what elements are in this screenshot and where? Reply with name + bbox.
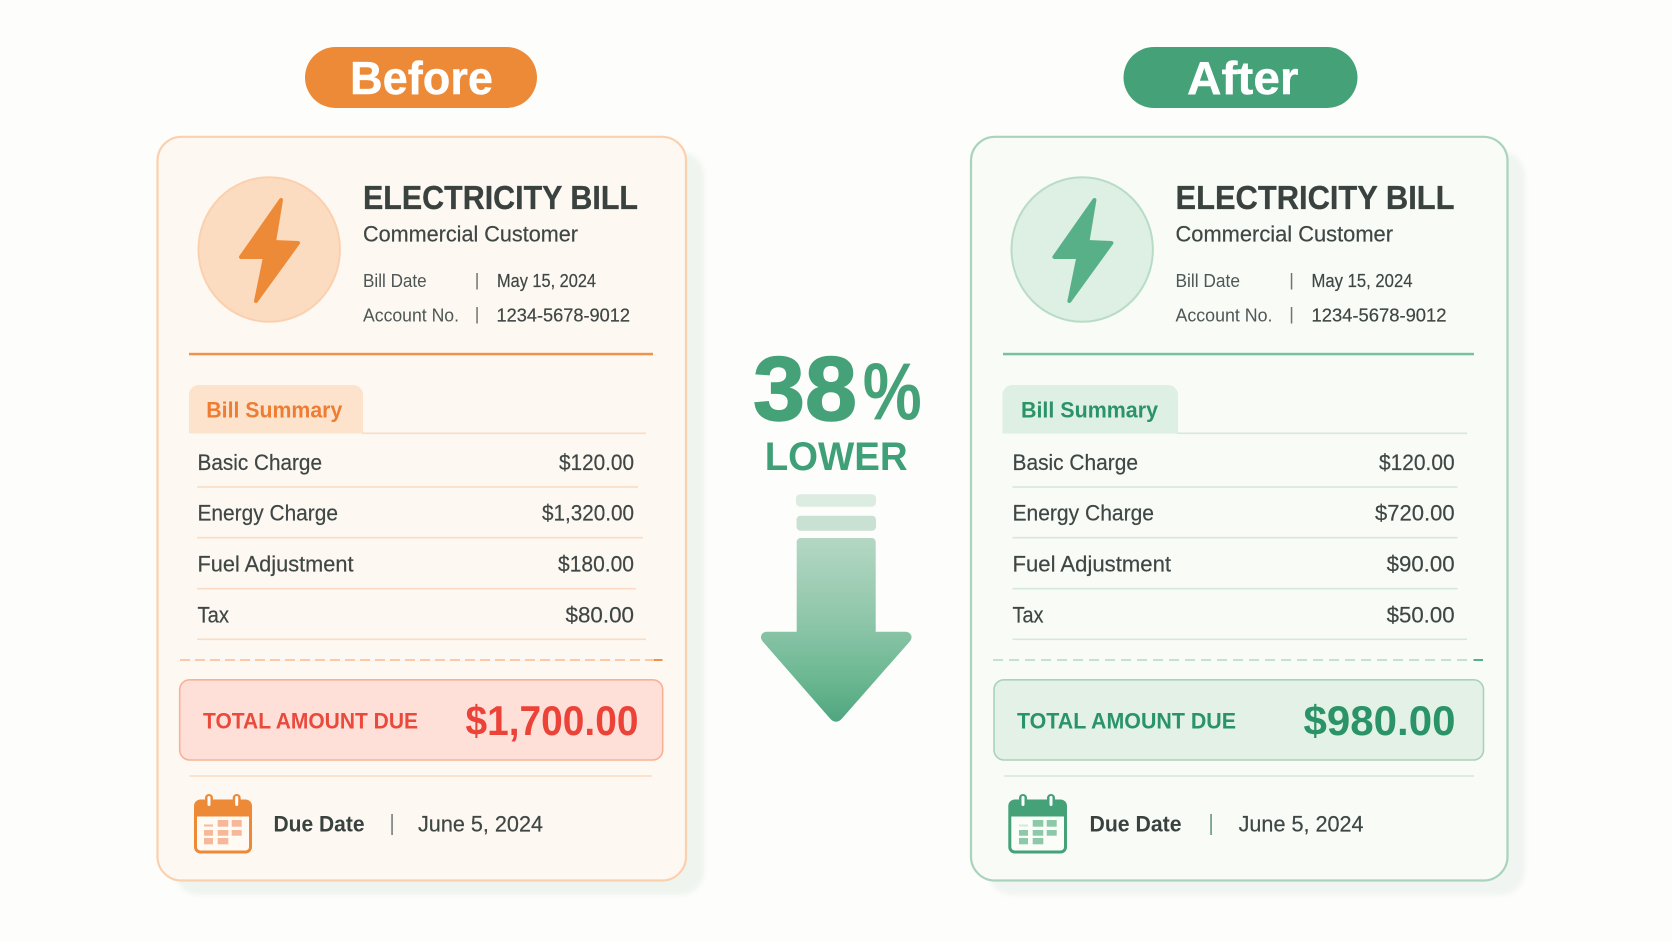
callout: 38% lower: 38 bbox=[753, 339, 857, 440]
text: due date: Due Date bbox=[274, 812, 364, 837]
row: tax bbox=[1012, 602, 1455, 627]
callout: total amount due: $980.00 bbox=[1304, 697, 1456, 744]
text: bill date bbox=[363, 271, 596, 291]
row: tax: $50.00 bbox=[1387, 602, 1455, 627]
row: fuel adjustment: $90.00 bbox=[1387, 552, 1455, 577]
badge: Before bbox=[305, 47, 537, 108]
panel: before bill bbox=[158, 137, 704, 895]
badge: After bbox=[1124, 47, 1358, 108]
row: basic charge: Basic Charge bbox=[198, 450, 322, 475]
row: fuel adjustment: Fuel Adjustment bbox=[1012, 552, 1171, 577]
text: account number: 1234-5678-9012 bbox=[1312, 306, 1446, 326]
text: account number: Account No. bbox=[363, 306, 459, 326]
text: customer type: Commercial Customer bbox=[1176, 222, 1393, 247]
row: energy charge bbox=[1012, 501, 1455, 526]
row: fuel adjustment bbox=[1012, 552, 1455, 577]
row: basic charge: $120.00 bbox=[1379, 450, 1455, 475]
icon: calendar bbox=[195, 794, 251, 852]
icon: calendar bbox=[1009, 794, 1066, 852]
callout: total amount due bbox=[180, 680, 663, 760]
text: due date bbox=[1090, 812, 1364, 837]
text: bill date bbox=[1176, 271, 1412, 291]
callout: 38% lower: % bbox=[863, 348, 922, 438]
row: fuel adjustment: $180.00 bbox=[558, 552, 634, 577]
panel: after bill bbox=[971, 137, 1525, 895]
text: bill date: Bill Date bbox=[1176, 271, 1240, 291]
heading: electricity bill: ELECTRICITY BILL bbox=[1176, 179, 1454, 216]
row: basic charge bbox=[1012, 450, 1455, 475]
text: due date: June 5, 2024 bbox=[418, 812, 543, 837]
row: energy charge: Energy Charge bbox=[1012, 501, 1154, 526]
row: tax bbox=[198, 602, 634, 627]
row: energy charge: Energy Charge bbox=[198, 501, 338, 526]
row: energy charge: $720.00 bbox=[1375, 501, 1455, 526]
text: due date: Due Date bbox=[1090, 812, 1182, 837]
row: basic charge: $120.00 bbox=[559, 450, 634, 475]
row: basic charge: Basic Charge bbox=[1012, 450, 1138, 475]
row: energy charge bbox=[198, 501, 634, 526]
callout: total amount due bbox=[994, 680, 1484, 760]
tab: bill summary: Bill Summary bbox=[1021, 397, 1159, 422]
row: tax: Tax bbox=[198, 602, 229, 627]
tab: bill summary: Bill Summary bbox=[206, 397, 343, 422]
callout: total amount due: TOTAL AMOUNT DUE bbox=[203, 708, 418, 733]
row: tax: Tax bbox=[1012, 602, 1044, 627]
callout: total amount due: $1,700.00 bbox=[466, 697, 638, 744]
row: energy charge: $1,320.00 bbox=[542, 501, 634, 526]
callout: 38% lower bbox=[753, 339, 922, 479]
text: due date bbox=[274, 812, 543, 837]
row: tax: $80.00 bbox=[566, 602, 634, 627]
text: bill date: May 15, 2024 bbox=[1312, 271, 1412, 291]
text: bill date: May 15, 2024 bbox=[497, 271, 596, 291]
badge: Before: Before bbox=[350, 52, 493, 104]
badge: After: After bbox=[1187, 52, 1299, 104]
tab: bill summary bbox=[189, 385, 363, 434]
text: account number bbox=[1176, 306, 1446, 326]
row: fuel adjustment bbox=[198, 552, 634, 577]
callout: total amount due: TOTAL AMOUNT DUE bbox=[1017, 708, 1236, 733]
text: account number: Account No. bbox=[1176, 306, 1272, 326]
heading: electricity bill: ELECTRICITY BILL bbox=[363, 179, 638, 216]
text: customer type: Commercial Customer bbox=[363, 222, 578, 247]
icon: lightning bolt in circle bbox=[199, 177, 340, 322]
row: basic charge bbox=[198, 450, 634, 475]
text: bill date: Bill Date bbox=[363, 271, 427, 291]
text: account number: 1234-5678-9012 bbox=[496, 306, 630, 326]
text: due date: June 5, 2024 bbox=[1239, 812, 1364, 837]
arrow: down bbox=[761, 494, 912, 722]
text: account number bbox=[363, 306, 630, 326]
icon: lightning bolt in circle bbox=[1011, 177, 1153, 322]
tab: bill summary bbox=[1002, 385, 1178, 434]
callout: 38% lower: LOWER bbox=[765, 435, 908, 479]
row: fuel adjustment: Fuel Adjustment bbox=[198, 552, 354, 577]
